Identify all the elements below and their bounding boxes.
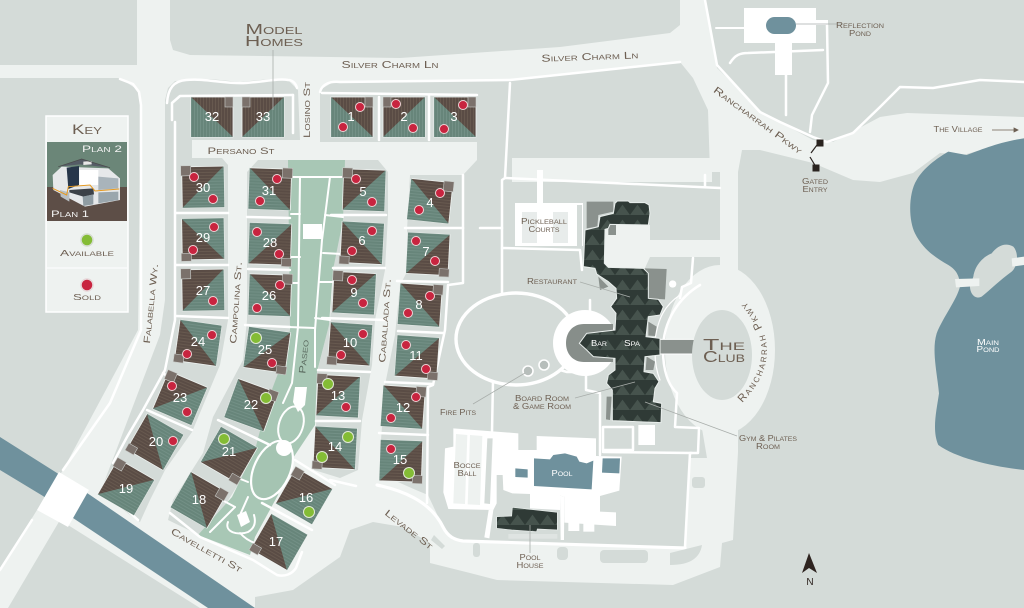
lot 25 [243, 327, 292, 375]
model homes heading: Homes [245, 34, 303, 50]
lot 25: 25 [258, 342, 272, 357]
street labels: Persano St [208, 146, 275, 157]
club labels: House [516, 561, 544, 570]
lot 28: 28 [263, 235, 277, 250]
lot 4: 4 [426, 195, 434, 210]
lot 30: 30 [196, 180, 210, 195]
lot 8 [398, 282, 443, 327]
lot 22: 22 [244, 397, 258, 412]
top lot gray blocks [100, 79, 463, 538]
lot 26 [248, 273, 293, 316]
club labels: & Game Room [513, 402, 571, 411]
lots [97, 97, 476, 572]
bridge [37, 472, 89, 527]
club labels: Gated [802, 177, 829, 186]
lot 3: 3 [450, 109, 458, 124]
north arrow [802, 553, 817, 588]
water channel [0, 437, 255, 608]
street labels: Levade St [382, 508, 436, 553]
road lobes [431, 477, 705, 565]
panel: key [46, 116, 128, 312]
club labels: Room [756, 442, 780, 451]
street labels: Rancharrah Pkwy [737, 304, 767, 402]
lot 10 [327, 322, 372, 367]
club labels: Spa [624, 339, 640, 348]
lot 8: 8 [415, 297, 423, 312]
club labels: Club [703, 349, 745, 366]
lot 7: 7 [422, 244, 430, 259]
lot 4 [407, 177, 454, 224]
available legend: Available [60, 248, 114, 258]
lot 32 [191, 97, 233, 137]
lot 18: 18 [192, 492, 206, 507]
club labels: Pool [552, 469, 573, 478]
garden paths [210, 177, 345, 545]
plan 1 label: Plan 1 [51, 209, 89, 220]
lot 2: 2 [400, 109, 408, 124]
club building [579, 201, 663, 423]
key title: Key [72, 121, 102, 137]
lot 16 [275, 466, 333, 524]
sold legend: Sold [73, 292, 102, 302]
club plaza [553, 310, 617, 376]
lot 33 [242, 97, 284, 137]
club labels: Pool [520, 553, 541, 562]
lot 32: 32 [205, 109, 219, 124]
village arrow [992, 128, 1018, 132]
lot 28 [248, 223, 293, 267]
club labels: Gym & Pilates [739, 434, 797, 443]
lot 1 [331, 97, 373, 137]
club grounds walks [456, 83, 720, 547]
lot 16: 16 [299, 490, 313, 505]
club labels: The Village [934, 125, 982, 134]
club labels: Reflection [836, 21, 884, 30]
lot 23 [152, 370, 208, 425]
spa pool right [602, 458, 620, 473]
club labels [440, 21, 1000, 570]
lot 23: 23 [173, 390, 187, 405]
lot 21 [200, 427, 258, 485]
lot 11 [395, 335, 440, 380]
lot 1: 1 [347, 109, 355, 124]
lot 24 [173, 320, 222, 368]
lot 13: 13 [331, 388, 345, 403]
lot 30 [181, 165, 224, 208]
pool [534, 453, 593, 489]
lot 12 [381, 384, 426, 429]
lot 26: 26 [262, 288, 276, 303]
lot 15 [379, 440, 424, 484]
club labels: Bocce [454, 461, 480, 470]
lot 14: 14 [328, 439, 342, 454]
street labels: Silver Charm Ln [342, 60, 438, 71]
reflection pond area [705, 0, 1024, 142]
street labels: Silver Charm Ln [541, 50, 639, 65]
street labels: Caballada St. [377, 279, 394, 363]
neighborhood curb lines [0, 62, 685, 576]
street labels: Losino St [302, 81, 313, 138]
club labels: Ball [458, 469, 477, 478]
reflection pond [766, 17, 796, 34]
club labels: Pond [976, 345, 1000, 354]
club labels: Fire Pits [440, 408, 476, 417]
street labels: Rancharrah Pkwy [711, 85, 804, 157]
lot 6: 6 [358, 233, 366, 248]
lot 19 [97, 457, 155, 515]
bocce and pool plaza [443, 425, 655, 540]
gated entry markers [810, 140, 823, 171]
lot 31: 31 [262, 183, 276, 198]
club labels: Board Room [515, 394, 569, 403]
lot 20 [125, 413, 183, 472]
lot 9: 9 [350, 285, 358, 300]
pool house building [497, 507, 557, 532]
label: pickleball courts: Pickleball [521, 217, 568, 226]
lot 12: 12 [396, 400, 410, 415]
lot 6 [339, 221, 384, 266]
ring road center island [692, 310, 752, 400]
lot 31 [248, 167, 293, 210]
lot 21: 21 [222, 444, 236, 459]
lot 5: 5 [359, 184, 367, 199]
lot 18 [171, 471, 229, 529]
plan 2 label: Plan 2 [82, 144, 122, 155]
key plan image [47, 142, 127, 221]
lot 15: 15 [393, 452, 407, 467]
lot 20: 20 [149, 434, 163, 449]
lot 2 [383, 97, 425, 137]
fire pits [523, 360, 549, 376]
main pond [910, 138, 1024, 470]
street labels: Cavelletti St [169, 526, 245, 576]
pickleball courts [515, 170, 583, 246]
spa pool left [515, 468, 528, 478]
street labels: Paseo [297, 339, 312, 374]
lot 9 [331, 270, 376, 315]
lot 22 [224, 378, 279, 432]
lot 13 [315, 373, 360, 418]
lot 3 [434, 97, 476, 137]
club building wings [587, 202, 701, 420]
leader lines [273, 24, 843, 553]
club labels: The [703, 337, 745, 354]
available legend [60, 234, 114, 258]
lot 27 [181, 268, 224, 311]
lot 14 [312, 426, 357, 471]
lot 10: 10 [343, 335, 357, 350]
label: pickleball courts: Courts [528, 225, 560, 234]
lot 19: 19 [119, 481, 133, 496]
club labels: Pond [849, 29, 872, 38]
street labels [142, 50, 808, 576]
lot 17 [249, 513, 307, 572]
club labels: Entry [802, 185, 828, 194]
lot 27: 27 [196, 283, 210, 298]
lot 29: 29 [196, 230, 210, 245]
north arrow: N [806, 577, 814, 588]
street labels: Campolina St. [228, 262, 245, 344]
club labels: Main [977, 338, 999, 347]
lot 24: 24 [191, 334, 205, 349]
lot 33: 33 [256, 109, 270, 124]
club labels: Bar [591, 339, 608, 348]
lot 7 [406, 232, 451, 277]
paseo green [198, 160, 345, 555]
lot 5 [341, 168, 386, 211]
lot 11: 11 [409, 348, 423, 363]
lot 17: 17 [269, 534, 283, 549]
sold legend [73, 279, 102, 302]
model homes heading: Model [246, 22, 303, 38]
lot 29 [181, 218, 224, 261]
club labels: Restaurant [527, 277, 577, 286]
street labels: Falabella Wy. [142, 263, 161, 344]
